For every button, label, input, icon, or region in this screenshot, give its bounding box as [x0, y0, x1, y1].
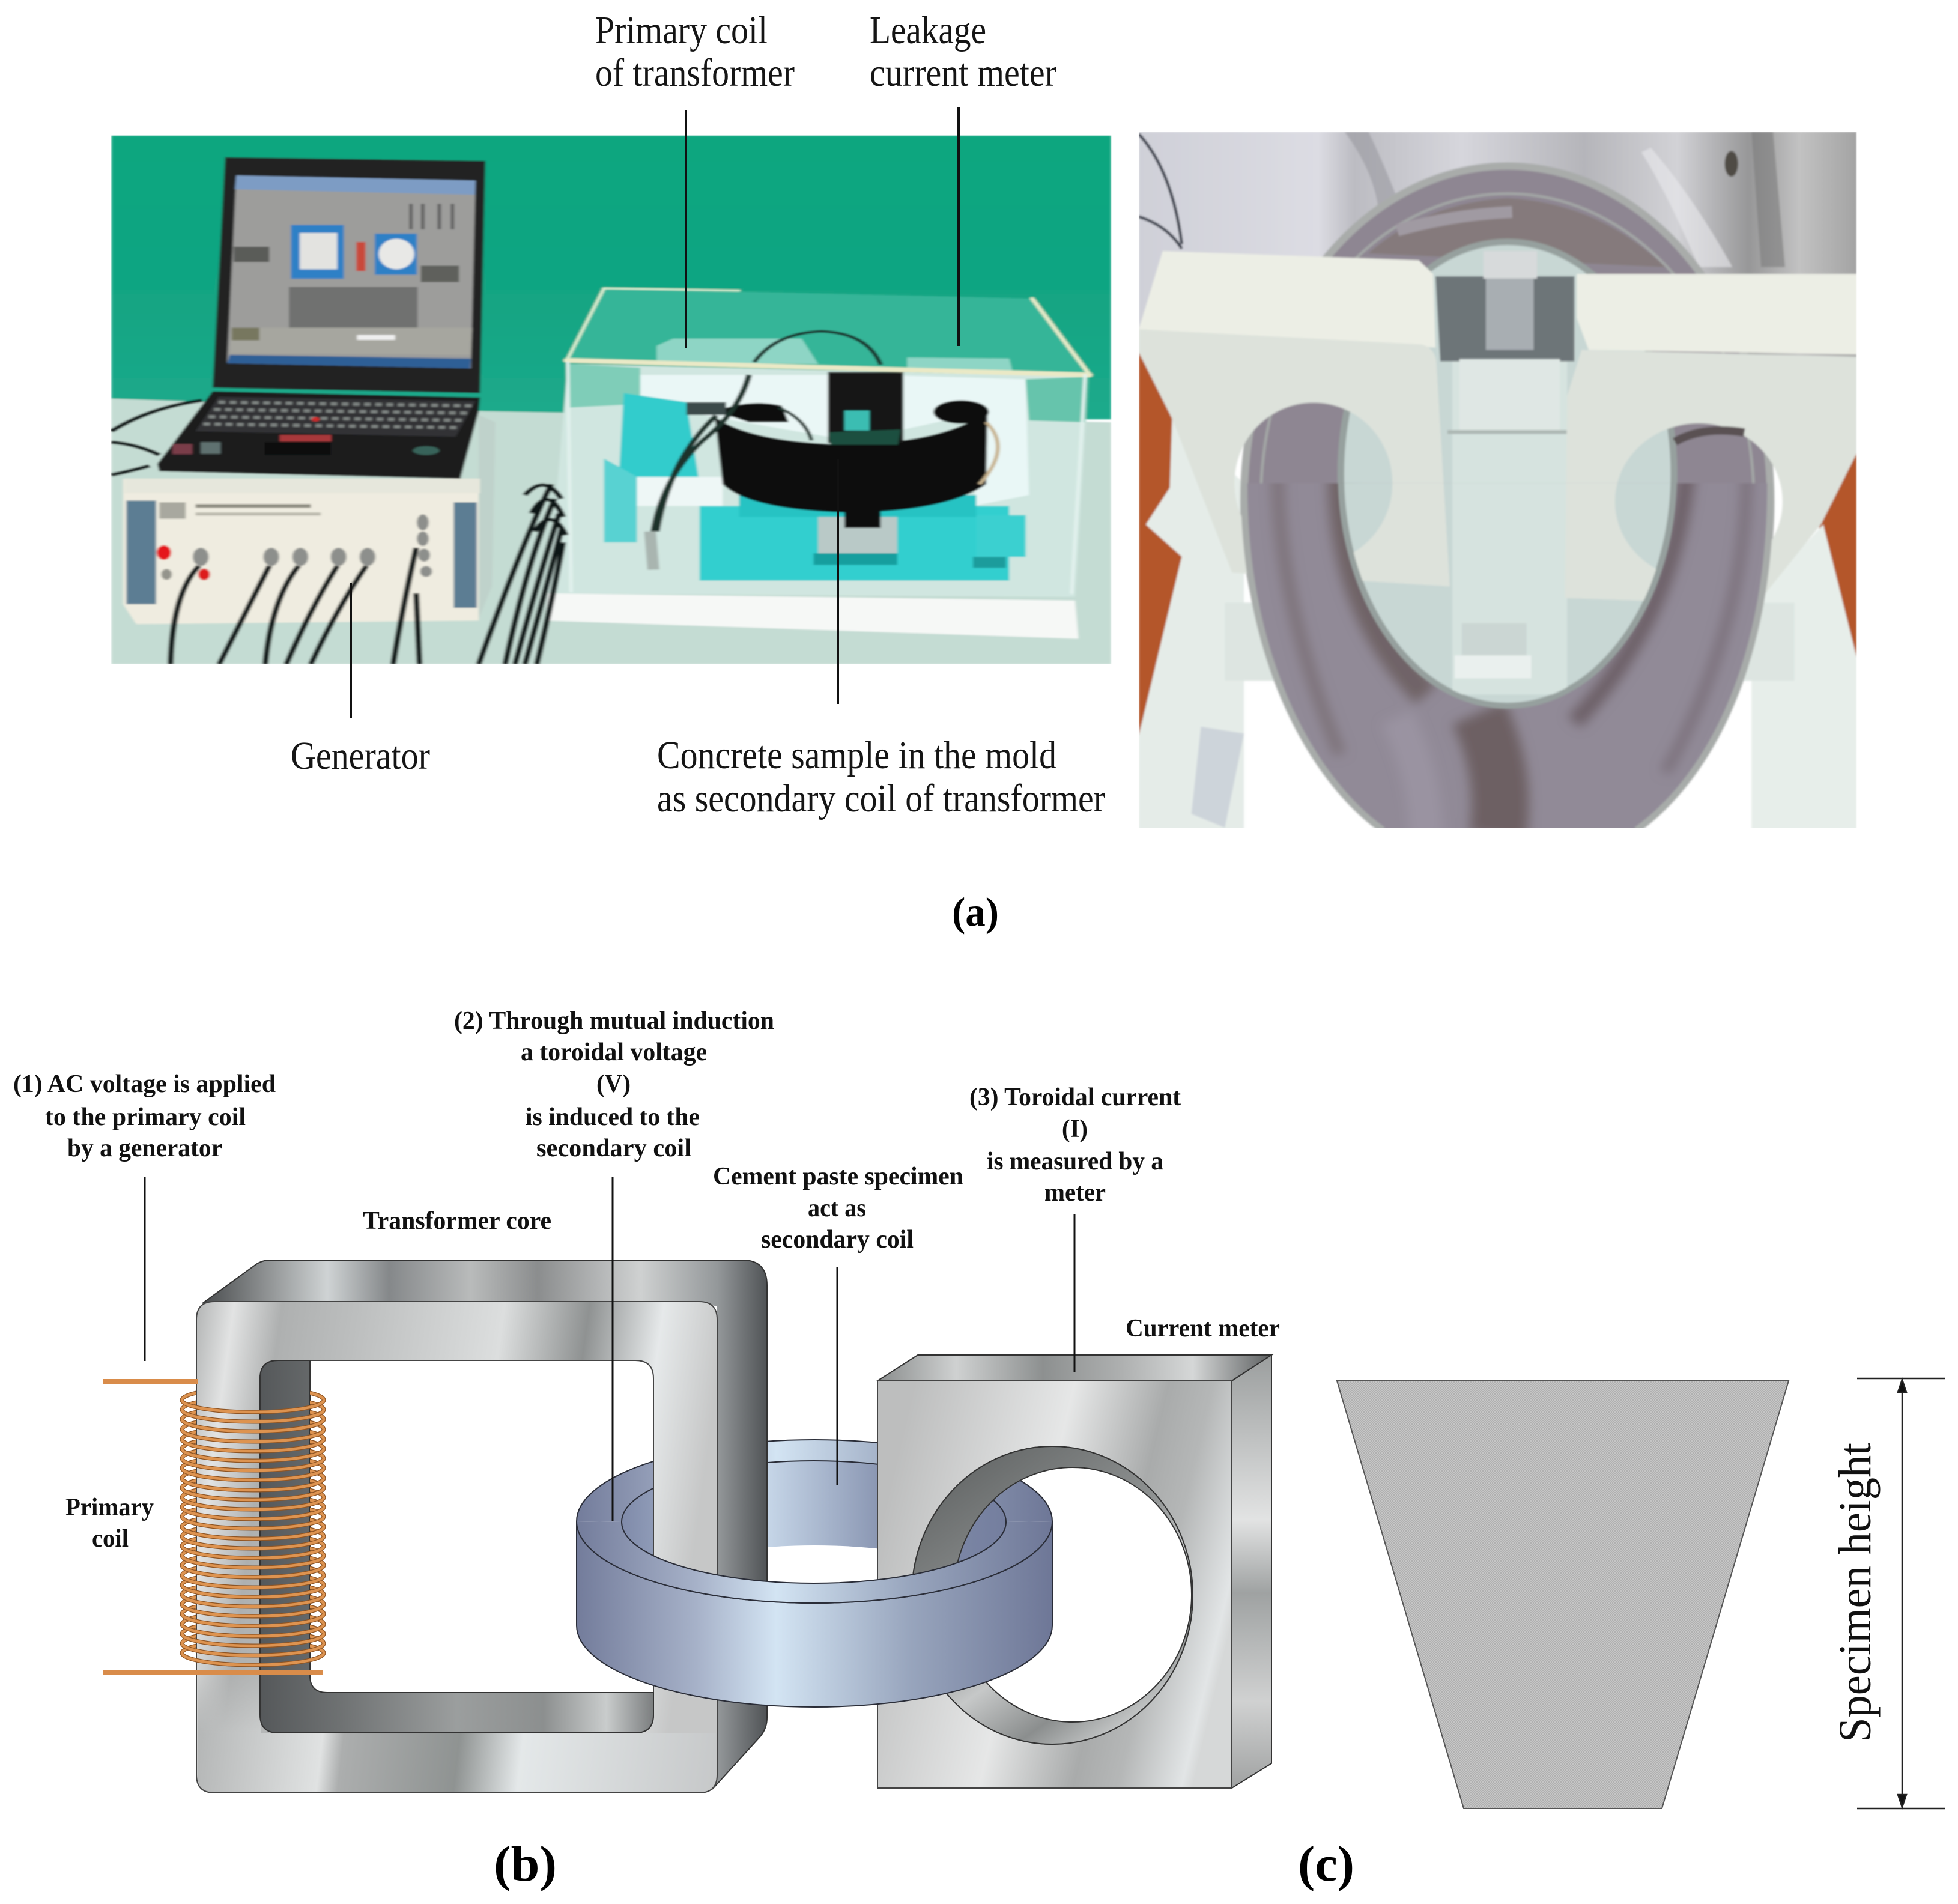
coil back turns — [182, 1388, 324, 1653]
leader: step 3 — [1074, 1214, 1075, 1372]
label: concrete sample — [657, 733, 1105, 820]
ring back half — [577, 1440, 1052, 1668]
cables in box — [650, 331, 998, 569]
label: step 2 mutual induction: (V) — [596, 1070, 631, 1098]
label: primary coil of transformer: of transformer — [595, 51, 795, 95]
label: step 3 toroidal current: (I) — [1062, 1115, 1088, 1143]
label: primary coil: coil — [92, 1525, 129, 1553]
label: specimen height: Specimen height — [1830, 1443, 1881, 1742]
label: step 1 AC voltage: (1) AC voltage is applied — [13, 1070, 276, 1098]
panel heading (a): (a) — [952, 889, 999, 935]
label: primary coil — [65, 1494, 154, 1553]
label: cement paste specimen — [713, 1163, 963, 1254]
leader: primary coil of transformer — [685, 110, 687, 348]
label: generator: Generator — [291, 734, 430, 778]
ring front portion with mottling — [1244, 242, 1771, 837]
primary coil front turns and wires — [103, 1379, 324, 1675]
white base — [1139, 419, 1856, 830]
label: primary coil of transformer — [595, 8, 795, 95]
label: step 1 AC voltage: by a generator — [67, 1135, 222, 1162]
transformer core — [196, 1260, 767, 1793]
label: step 2 mutual induction: secondary coil — [536, 1135, 691, 1162]
specimen height dimension — [1857, 1378, 1945, 1808]
leader: step 1 — [144, 1177, 145, 1361]
label: leakage current meter: Leakage — [870, 8, 986, 52]
leader: leakage current meter — [957, 107, 960, 346]
photo: mold with concrete ring in white transformer core — [1139, 132, 1856, 837]
ring front half — [577, 1521, 1052, 1707]
label: concrete sample: as secondary coil of transformer — [657, 777, 1105, 820]
label: step 2 mutual induction — [454, 1007, 774, 1162]
generator box — [123, 415, 496, 624]
orange table — [1139, 352, 1856, 736]
specimen trapezoid — [1337, 1381, 1789, 1808]
current meter block — [877, 1355, 1271, 1788]
label: current meter: Current meter — [1126, 1315, 1280, 1342]
label: step 2 mutual induction: (2) Through mutual induction — [454, 1007, 774, 1035]
white core blocks — [1139, 251, 1856, 605]
glass lid region — [548, 288, 1088, 597]
label: transformer core: Transformer core — [363, 1207, 551, 1235]
transformer white frame — [604, 375, 1029, 581]
label: step 1 AC voltage: to the primary coil — [45, 1103, 246, 1131]
photo: laptop, generator and transformer test rig on green backdrop — [111, 135, 1111, 664]
leader: step 2 — [611, 1177, 614, 1521]
label: step 2 mutual induction: is induced to the — [526, 1103, 700, 1131]
label: cement paste specimen: secondary coil — [761, 1226, 914, 1254]
leader: cement paste — [836, 1267, 838, 1485]
label: leakage current meter: current meter — [870, 51, 1056, 95]
label: step 3 toroidal current — [969, 1084, 1181, 1207]
label: concrete sample: Concrete sample in the mold — [657, 733, 1056, 777]
leader: concrete sample — [837, 459, 839, 704]
black cables — [111, 401, 566, 664]
label: step 1 AC voltage — [13, 1070, 276, 1162]
label: cement paste specimen: act as — [808, 1195, 866, 1222]
label: step 3 toroidal current: meter — [1044, 1179, 1106, 1207]
label: leakage current meter — [870, 8, 1056, 95]
black laptop — [157, 157, 485, 479]
panel heading (b): (b) — [494, 1836, 557, 1892]
concrete ring under core — [1240, 162, 1775, 705]
label: primary coil: Primary — [65, 1494, 154, 1521]
label: step 3 toroidal current: (3) Toroidal current — [969, 1084, 1181, 1111]
panel heading (c): (c) — [1298, 1836, 1354, 1892]
label: cement paste specimen: Cement paste specimen — [713, 1163, 963, 1190]
diagram: toroidal transformer schematic — [103, 1260, 1271, 1793]
leader: generator — [350, 583, 352, 718]
black ring sample — [687, 372, 989, 528]
label: step 2 mutual induction: a toroidal voltage — [521, 1038, 707, 1066]
glass frame — [568, 288, 1088, 593]
label: primary coil of transformer: Primary coil — [595, 8, 768, 52]
label: step 3 toroidal current: is measured by a — [987, 1148, 1163, 1175]
